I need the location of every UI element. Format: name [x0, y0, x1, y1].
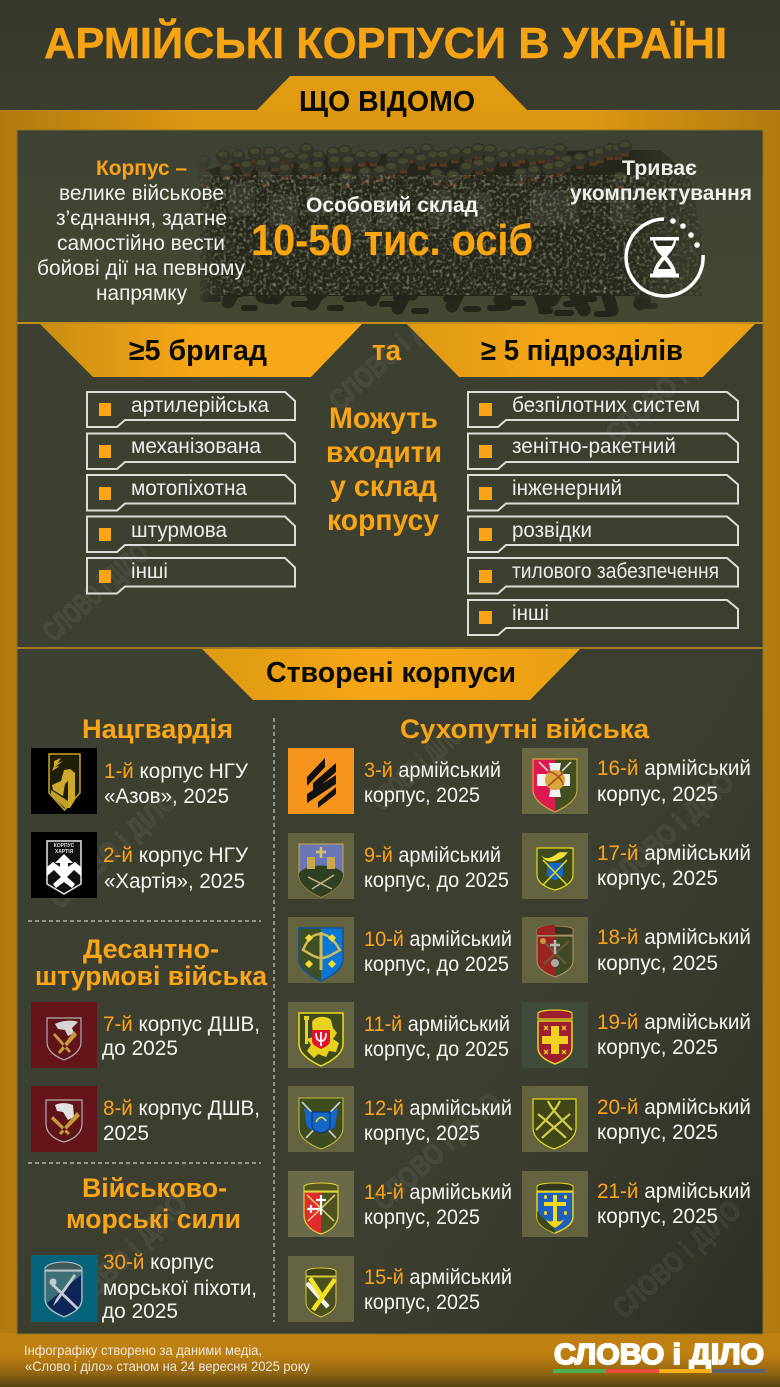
text: 3-й армійський — [364, 759, 501, 782]
text: 30-й корпус — [103, 1251, 214, 1274]
text — [364, 928, 512, 976]
text: корпус, 2025 — [597, 1205, 718, 1228]
heading: Сухопутні війська: Сухопутні війська — [400, 714, 650, 744]
text — [364, 844, 509, 892]
item: механізована — [87, 434, 295, 469]
text: корпус, до 2025 — [364, 1038, 509, 1061]
item: зенітно-ракетний: зенітно-ракетний — [512, 434, 676, 458]
text: 15-й армійський — [364, 1266, 512, 1289]
emblem: Азов — [31, 748, 97, 814]
emblem: 19 — [522, 1002, 588, 1068]
heading: ВМС — [66, 1173, 241, 1234]
watermarks: СЛОВО і ДІЛО — [54, 1188, 194, 1327]
text — [364, 1097, 512, 1145]
text: 1-й корпус НГУ — [104, 760, 249, 783]
item: 15-й — [288, 1256, 512, 1322]
text: 16-й армійський — [597, 757, 751, 780]
item: інші — [468, 600, 738, 635]
text: 2-й корпус НГУ — [103, 844, 249, 867]
heading: ВМС: Військово- — [82, 1173, 227, 1203]
column: army corps right — [522, 748, 751, 1237]
item: інші — [87, 558, 295, 594]
item: інженерний — [468, 475, 738, 510]
emblem: Хартія: КОРПУС — [54, 843, 75, 849]
text — [103, 844, 249, 893]
emblem: Хартія — [31, 832, 97, 898]
central caption — [326, 402, 442, 537]
personnel figure — [251, 194, 533, 265]
item: 9-й — [288, 833, 509, 899]
text: корпус, 2025 — [364, 1206, 480, 1229]
item: 8-й корпус — [31, 1086, 260, 1152]
text — [597, 842, 751, 890]
text — [364, 1013, 510, 1061]
watermarks: СЛОВО і ДІЛО — [607, 1194, 748, 1325]
text: корпус, до 2025 — [364, 869, 509, 892]
item: артилерійська: артилерійська — [131, 393, 269, 417]
item: безпілотних систем: безпілотних систем — [512, 393, 700, 417]
text: 21-й армійський — [597, 1180, 751, 1203]
text — [597, 1011, 751, 1059]
emblem: 9 — [288, 833, 354, 899]
text: 17-й армійський — [597, 842, 751, 865]
text: корпус, 2025 — [364, 784, 480, 807]
banner: units: ≥ 5 підрозділів — [481, 335, 683, 367]
watermarks — [31, 233, 748, 1327]
definition text: з’єднання, здатне — [56, 207, 227, 230]
central caption: входити — [326, 436, 442, 469]
item: тилового забезпечення: тилового забезпечення — [512, 559, 719, 583]
text: корпус, 2025 — [364, 1291, 480, 1314]
text: корпус, 2025 — [597, 783, 718, 806]
definition text: бойові дії на певному — [37, 257, 245, 280]
text: «Хартія», 2025 — [104, 870, 245, 893]
footer source: «Слово і діло» станом на 24 вересня 2025 року — [25, 1358, 310, 1374]
text: 12-й армійський — [364, 1097, 512, 1120]
text — [102, 1013, 260, 1060]
item: 11-й — [288, 1002, 510, 1068]
banner: brigades: ≥5 бригад — [129, 335, 267, 367]
item: артилерійська — [87, 392, 295, 427]
banner: created corps — [202, 649, 580, 700]
logo: Слово і діло: СЛОВО і ДІЛО — [554, 1339, 764, 1371]
definition text: напрямку — [96, 282, 187, 305]
item: інші: інші — [512, 601, 549, 625]
text: 7-й корпус ДШВ, — [103, 1013, 260, 1036]
text: корпус, 2025 — [597, 1036, 718, 1059]
emblem: 30 МП — [31, 1255, 98, 1322]
list: brigades — [87, 392, 295, 594]
staffing text: укомплектування — [570, 182, 752, 205]
item: тилового забезпечення — [468, 558, 738, 594]
item: зенітно-ракетний — [468, 434, 738, 469]
text: 2025 — [103, 1122, 149, 1145]
emblem: 17 — [522, 833, 588, 899]
staffing text — [570, 157, 752, 205]
text: 19-й армійський — [597, 1011, 751, 1034]
item: мотопіхотна: мотопіхотна — [131, 476, 247, 500]
emblem: 18 — [522, 917, 588, 983]
text — [597, 1180, 751, 1228]
text — [597, 1096, 751, 1144]
text — [597, 926, 751, 975]
text: до 2025 — [102, 1037, 178, 1060]
text: до 2025 — [102, 1300, 178, 1323]
item: 1-й корпус — [31, 748, 249, 814]
watermarks: СЛОВО і ДІЛО — [323, 286, 464, 417]
text: 14-й армійський — [364, 1181, 512, 1204]
emblem: 3 — [288, 748, 354, 814]
banner: brigades — [40, 324, 362, 377]
item: 20-й — [522, 1086, 751, 1152]
watermarks: СЛОВО і ДІЛО — [600, 319, 741, 450]
text — [364, 759, 501, 807]
text: корпус, 2025 — [597, 952, 718, 975]
watermarks: СЛОВО і ДІЛО — [37, 537, 155, 648]
personnel figure: 10-50 тис. осіб — [251, 216, 533, 265]
text — [597, 757, 751, 806]
definition text: самостійно вести — [57, 232, 225, 255]
item: штурмова: штурмова — [131, 518, 227, 542]
item: 3-й — [288, 748, 501, 814]
item: 10-й — [288, 917, 512, 983]
text: корпус, 2025 — [597, 867, 718, 890]
central caption: корпусу — [327, 504, 439, 537]
text: морської піхоти, — [103, 1277, 257, 1300]
central caption: Можуть — [329, 402, 438, 435]
definition text — [37, 157, 245, 305]
label: and: та — [372, 335, 402, 367]
emblem: 20 — [522, 1086, 588, 1152]
banner: що відомо — [257, 76, 527, 118]
column: army corps left — [288, 748, 512, 1322]
panel: hero — [18, 130, 762, 322]
item: штурмова — [87, 516, 295, 552]
banner: що відомо: ЩО ВІДОМО — [299, 86, 475, 118]
text — [103, 1097, 260, 1145]
item: 19-й — [522, 1002, 751, 1068]
page background — [0, 0, 780, 110]
heading: ДШВ: Десантно- — [83, 934, 219, 964]
text: корпус, до 2025 — [364, 953, 509, 976]
emblem: 21 — [522, 1171, 588, 1237]
item: розвідки — [468, 516, 738, 552]
item: розвідки: розвідки — [512, 518, 592, 542]
emblem: 15 — [288, 1256, 354, 1322]
text: 20-й армійський — [597, 1096, 751, 1119]
footer source: Інфографіку створено за даними медіа, — [24, 1342, 262, 1358]
text: корпус, 2025 — [597, 1121, 718, 1144]
text — [364, 1181, 512, 1229]
watermarks: СЛОВО і ДІЛО — [31, 233, 120, 317]
personnel figure: Особовий склад — [306, 194, 478, 217]
item: механізована: механізована — [131, 434, 261, 458]
panel: composition — [17, 323, 763, 648]
watermarks: СЛОВО і ДІЛО — [367, 1086, 508, 1217]
item: 18-й — [522, 917, 751, 983]
item: інженерний: інженерний — [512, 476, 622, 500]
text — [364, 1266, 512, 1314]
banner: units — [407, 324, 755, 377]
text: 8-й корпус ДШВ, — [103, 1097, 260, 1120]
icon: hourglass timer — [626, 218, 703, 296]
item: 2-й корпус — [31, 832, 249, 898]
emblem: 10 — [288, 917, 354, 983]
text: 9-й армійський — [364, 844, 501, 867]
emblem: 12 — [288, 1086, 354, 1152]
watermarks: СЛОВО і ДІЛО — [600, 766, 741, 897]
emblem: 14 — [288, 1171, 354, 1237]
item: 12-й — [288, 1086, 512, 1152]
emblem: 16 — [522, 748, 588, 814]
column: branches — [31, 714, 268, 1323]
emblem: 8 ДШВ — [31, 1086, 97, 1152]
photo: marching soldiers — [196, 140, 702, 314]
watermarks: СЛОВО і ДІЛО — [365, 720, 468, 817]
item: 30-й корпус — [31, 1251, 257, 1323]
item: мотопіхотна — [87, 475, 295, 510]
item: 7-й корпус — [31, 1002, 260, 1068]
emblem: 11 — [288, 1002, 354, 1068]
heading: ДШВ: штурмові війська — [35, 961, 268, 991]
text: «Азов», 2025 — [104, 785, 229, 808]
definition text: Корпус – — [96, 157, 187, 180]
text: 18-й армійський — [597, 926, 751, 949]
item: 17-й — [522, 833, 751, 899]
item: безпілотних систем — [468, 392, 738, 427]
emblem: 7 ДШВ — [31, 1002, 97, 1068]
item: інші: інші — [131, 559, 168, 583]
text: 11-й армійський — [364, 1013, 510, 1036]
item: 14-й — [288, 1171, 512, 1237]
footer source — [24, 1342, 310, 1374]
emblem: Хартія: ХАРТІЯ — [55, 849, 74, 855]
text: корпус, 2025 — [364, 1122, 480, 1145]
text — [102, 1251, 257, 1323]
text — [104, 760, 249, 808]
watermarks: СЛОВО і ДІЛО — [43, 784, 184, 915]
heading: ДШВ — [35, 934, 268, 991]
central caption: у склад — [330, 470, 437, 503]
heading: Нацгвардія: Нацгвардія — [82, 714, 233, 744]
item: 21-й — [522, 1171, 751, 1237]
definition text: велике військове — [59, 182, 224, 205]
banner: created corps: Створені корпуси — [266, 657, 516, 689]
list: units — [468, 392, 738, 635]
title: АРМІЙСЬКІ КОРПУСИ В УКРАЇНІ — [44, 17, 727, 68]
staffing text: Триває — [622, 157, 697, 180]
text: 10-й армійський — [364, 928, 512, 951]
heading: ВМС: морські сили — [66, 1204, 241, 1234]
item: 16-й — [522, 748, 751, 814]
